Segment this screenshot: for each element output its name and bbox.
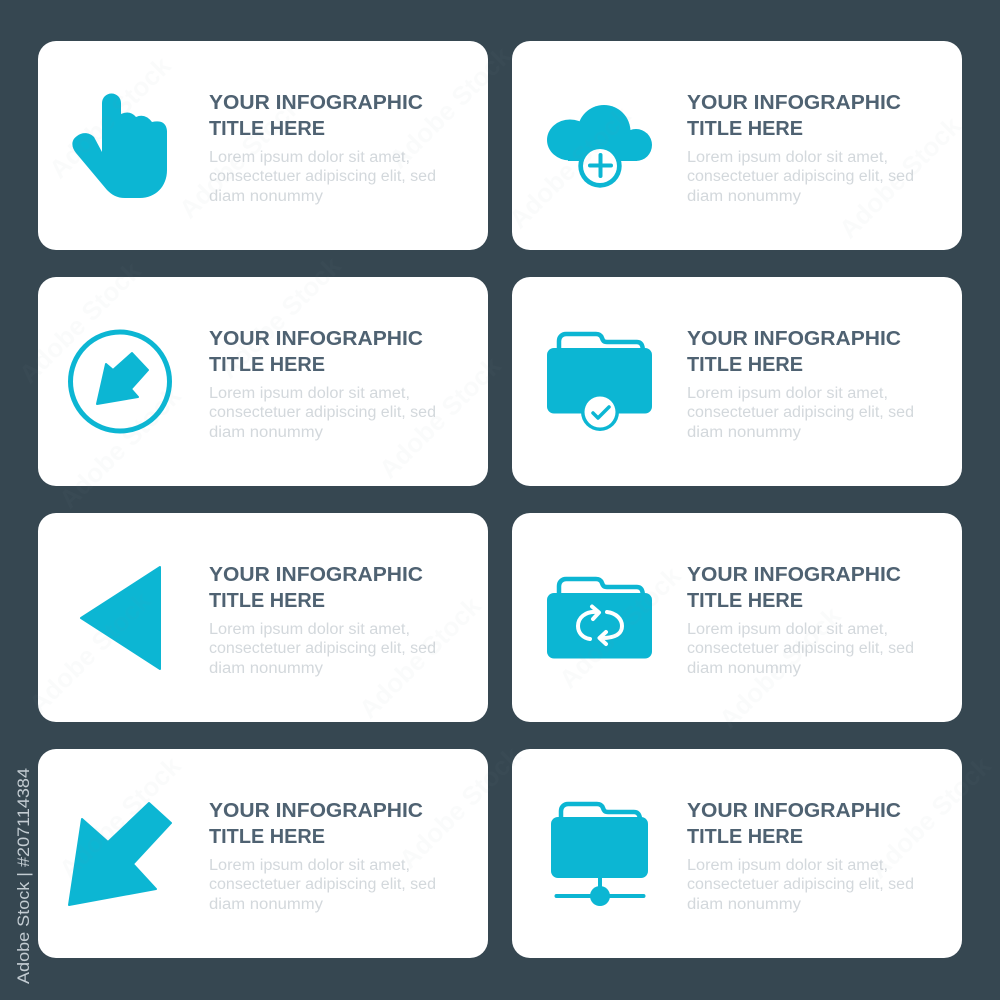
text block: Lorem ipsum dolor sit amet, bbox=[687, 857, 888, 874]
heading: YOUR INFOGRAPHIC bbox=[209, 328, 423, 350]
heading: YOUR INFOGRAPHIC bbox=[687, 92, 901, 114]
watermark pattern: Adobe Stock bbox=[213, 250, 347, 384]
heading: TITLE HERE bbox=[687, 590, 803, 612]
panel: folder check bbox=[512, 277, 962, 486]
text block: Lorem ipsum dolor sit amet, bbox=[209, 385, 410, 402]
text block: Lorem ipsum dolor sit amet, bbox=[687, 385, 888, 402]
text block: Lorem ipsum dolor sit amet, bbox=[687, 621, 888, 638]
text block: consectetuer adipiscing elit, sed bbox=[209, 168, 436, 185]
text block: Lorem ipsum dolor sit amet, bbox=[209, 857, 410, 874]
icon: folder with sync arrows bbox=[547, 579, 652, 658]
panel: cloud add bbox=[512, 41, 962, 250]
text block: consectetuer adipiscing elit, sed bbox=[209, 876, 436, 893]
text block bbox=[687, 385, 914, 441]
text block: diam nonummy bbox=[209, 188, 323, 205]
watermark pattern: Adobe Stock bbox=[553, 560, 687, 694]
watermark pattern: Adobe Stock bbox=[13, 255, 147, 389]
text block: consectetuer adipiscing elit, sed bbox=[687, 404, 914, 421]
text block bbox=[209, 149, 436, 205]
icon: network folder bbox=[551, 804, 648, 906]
text block bbox=[687, 621, 914, 677]
text block: Lorem ipsum dolor sit amet, bbox=[209, 149, 410, 166]
heading bbox=[209, 800, 423, 848]
text block: diam nonummy bbox=[687, 896, 801, 913]
text block: Lorem ipsum dolor sit amet, bbox=[687, 149, 888, 166]
icon: cloud with plus bbox=[547, 105, 652, 188]
panel: large arrow bbox=[38, 749, 488, 958]
heading: TITLE HERE bbox=[209, 354, 325, 376]
watermark pattern: Adobe Stock bbox=[503, 100, 637, 234]
heading bbox=[209, 92, 423, 140]
text block: consectetuer adipiscing elit, sed bbox=[687, 168, 914, 185]
panel: folder network bbox=[512, 749, 962, 958]
watermark pattern: Adobe Stock bbox=[713, 600, 847, 734]
icon: pointing hand bbox=[72, 94, 167, 198]
heading: YOUR INFOGRAPHIC bbox=[209, 564, 423, 586]
panel: circled arrow bbox=[38, 277, 488, 486]
heading bbox=[687, 328, 901, 376]
text block: diam nonummy bbox=[687, 660, 801, 677]
watermark pattern: Adobe Stock bbox=[373, 350, 507, 484]
icon: circled down-left arrow bbox=[70, 332, 170, 431]
panel: triangle bbox=[38, 513, 488, 722]
heading bbox=[687, 92, 901, 140]
side credit: Adobe Stock | #207114384 bbox=[14, 768, 33, 984]
watermark pattern: Adobe Stock bbox=[173, 90, 307, 224]
text block: Lorem ipsum dolor sit amet, bbox=[209, 621, 410, 638]
watermark pattern: Adobe Stock bbox=[43, 50, 177, 184]
heading bbox=[209, 564, 423, 612]
text block bbox=[687, 149, 914, 205]
text block: consectetuer adipiscing elit, sed bbox=[209, 404, 436, 421]
text block bbox=[687, 857, 914, 913]
heading: YOUR INFOGRAPHIC bbox=[209, 800, 423, 822]
text block: diam nonummy bbox=[209, 660, 323, 677]
text block bbox=[209, 857, 436, 913]
heading: TITLE HERE bbox=[687, 826, 803, 848]
icon: folder with check bbox=[547, 334, 652, 431]
watermark pattern: Adobe Stock bbox=[863, 750, 997, 884]
icon: large down-left arrow bbox=[69, 803, 171, 905]
watermark pattern: Adobe Stock bbox=[53, 750, 187, 884]
text block: consectetuer adipiscing elit, sed bbox=[687, 876, 914, 893]
text block bbox=[209, 385, 436, 441]
panel: folder sync bbox=[512, 513, 962, 722]
heading bbox=[209, 328, 423, 376]
watermark pattern: Adobe Stock bbox=[393, 740, 527, 874]
text block: diam nonummy bbox=[209, 424, 323, 441]
text block: diam nonummy bbox=[687, 188, 801, 205]
watermark pattern: Adobe Stock bbox=[833, 110, 967, 244]
watermark pattern: Adobe Stock bbox=[23, 585, 157, 719]
heading: TITLE HERE bbox=[209, 118, 325, 140]
text block: consectetuer adipiscing elit, sed bbox=[687, 640, 914, 657]
text block: consectetuer adipiscing elit, sed bbox=[209, 640, 436, 657]
text block: diam nonummy bbox=[687, 424, 801, 441]
heading: YOUR INFOGRAPHIC bbox=[209, 92, 423, 114]
heading: TITLE HERE bbox=[687, 118, 803, 140]
heading: TITLE HERE bbox=[209, 826, 325, 848]
watermark pattern: Adobe Stock bbox=[353, 590, 487, 724]
watermark pattern: Adobe Stock bbox=[53, 380, 187, 514]
text block bbox=[209, 621, 436, 677]
heading: YOUR INFOGRAPHIC bbox=[687, 328, 901, 350]
heading: YOUR INFOGRAPHIC bbox=[687, 800, 901, 822]
heading: TITLE HERE bbox=[687, 354, 803, 376]
panel: hand pointer bbox=[38, 41, 488, 250]
text block: diam nonummy bbox=[209, 896, 323, 913]
heading bbox=[687, 564, 901, 612]
heading: TITLE HERE bbox=[209, 590, 325, 612]
heading bbox=[687, 800, 901, 848]
heading: YOUR INFOGRAPHIC bbox=[687, 564, 901, 586]
watermark pattern: Adobe Stock bbox=[383, 40, 517, 174]
icon: left triangle bbox=[81, 567, 160, 669]
